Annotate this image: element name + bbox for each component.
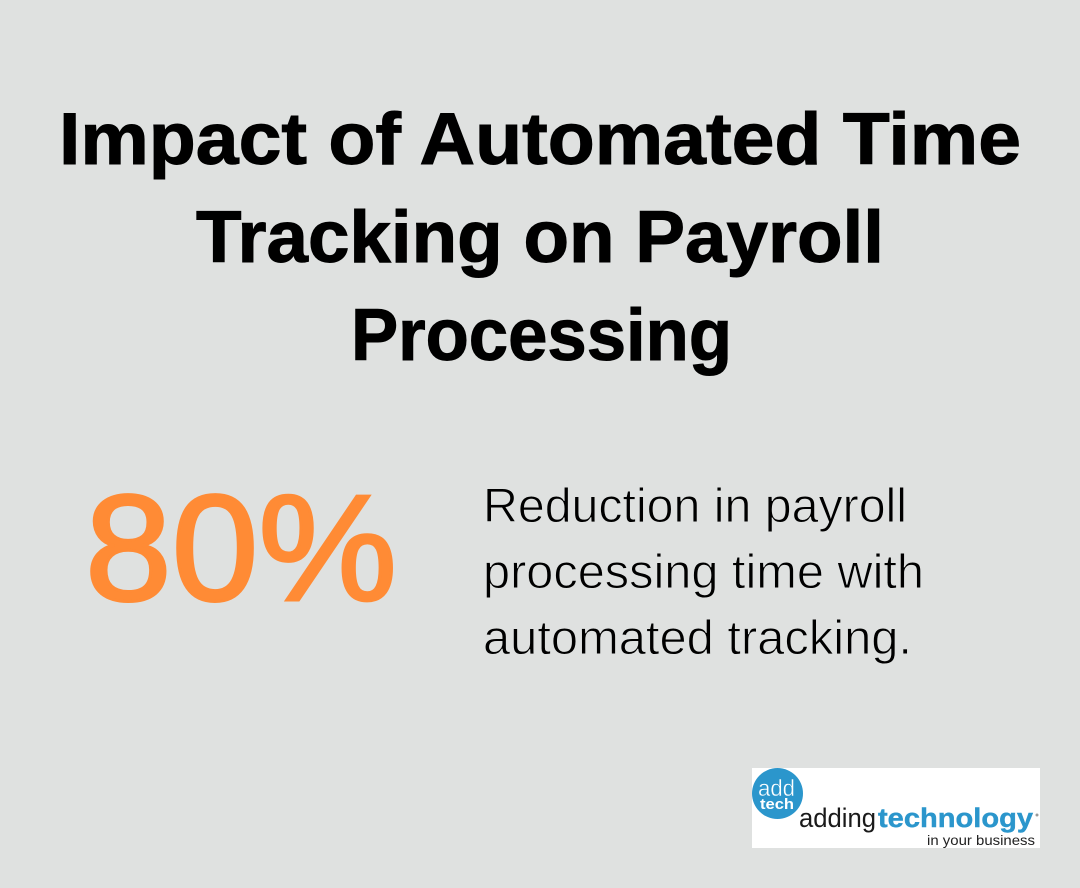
title: [59, 99, 1021, 376]
logo icon: add tech circle: [752, 768, 803, 819]
big statistic: 80%: 80%: [85, 463, 397, 632]
statistic description: [483, 480, 924, 665]
statistic description: automated tracking.: [483, 612, 912, 665]
logo tagline: in your business: [927, 832, 1035, 848]
logo wordmark: adding: [799, 803, 876, 833]
logo registered mark: [1036, 814, 1038, 816]
logo: adding technology: [752, 768, 1040, 848]
statistic description: processing time with: [483, 546, 924, 599]
title: Processing: [351, 295, 732, 376]
logo icon: add tech circle: tech: [760, 796, 794, 813]
title: Impact of Automated Time: [59, 99, 1021, 180]
logo icon: add tech circle: add: [758, 775, 795, 801]
logo wordmark: technology: [878, 803, 1033, 833]
logo wordmark: [799, 803, 1033, 833]
statistic description: Reduction in payroll: [483, 480, 907, 533]
title: Tracking on Payroll: [196, 197, 884, 278]
